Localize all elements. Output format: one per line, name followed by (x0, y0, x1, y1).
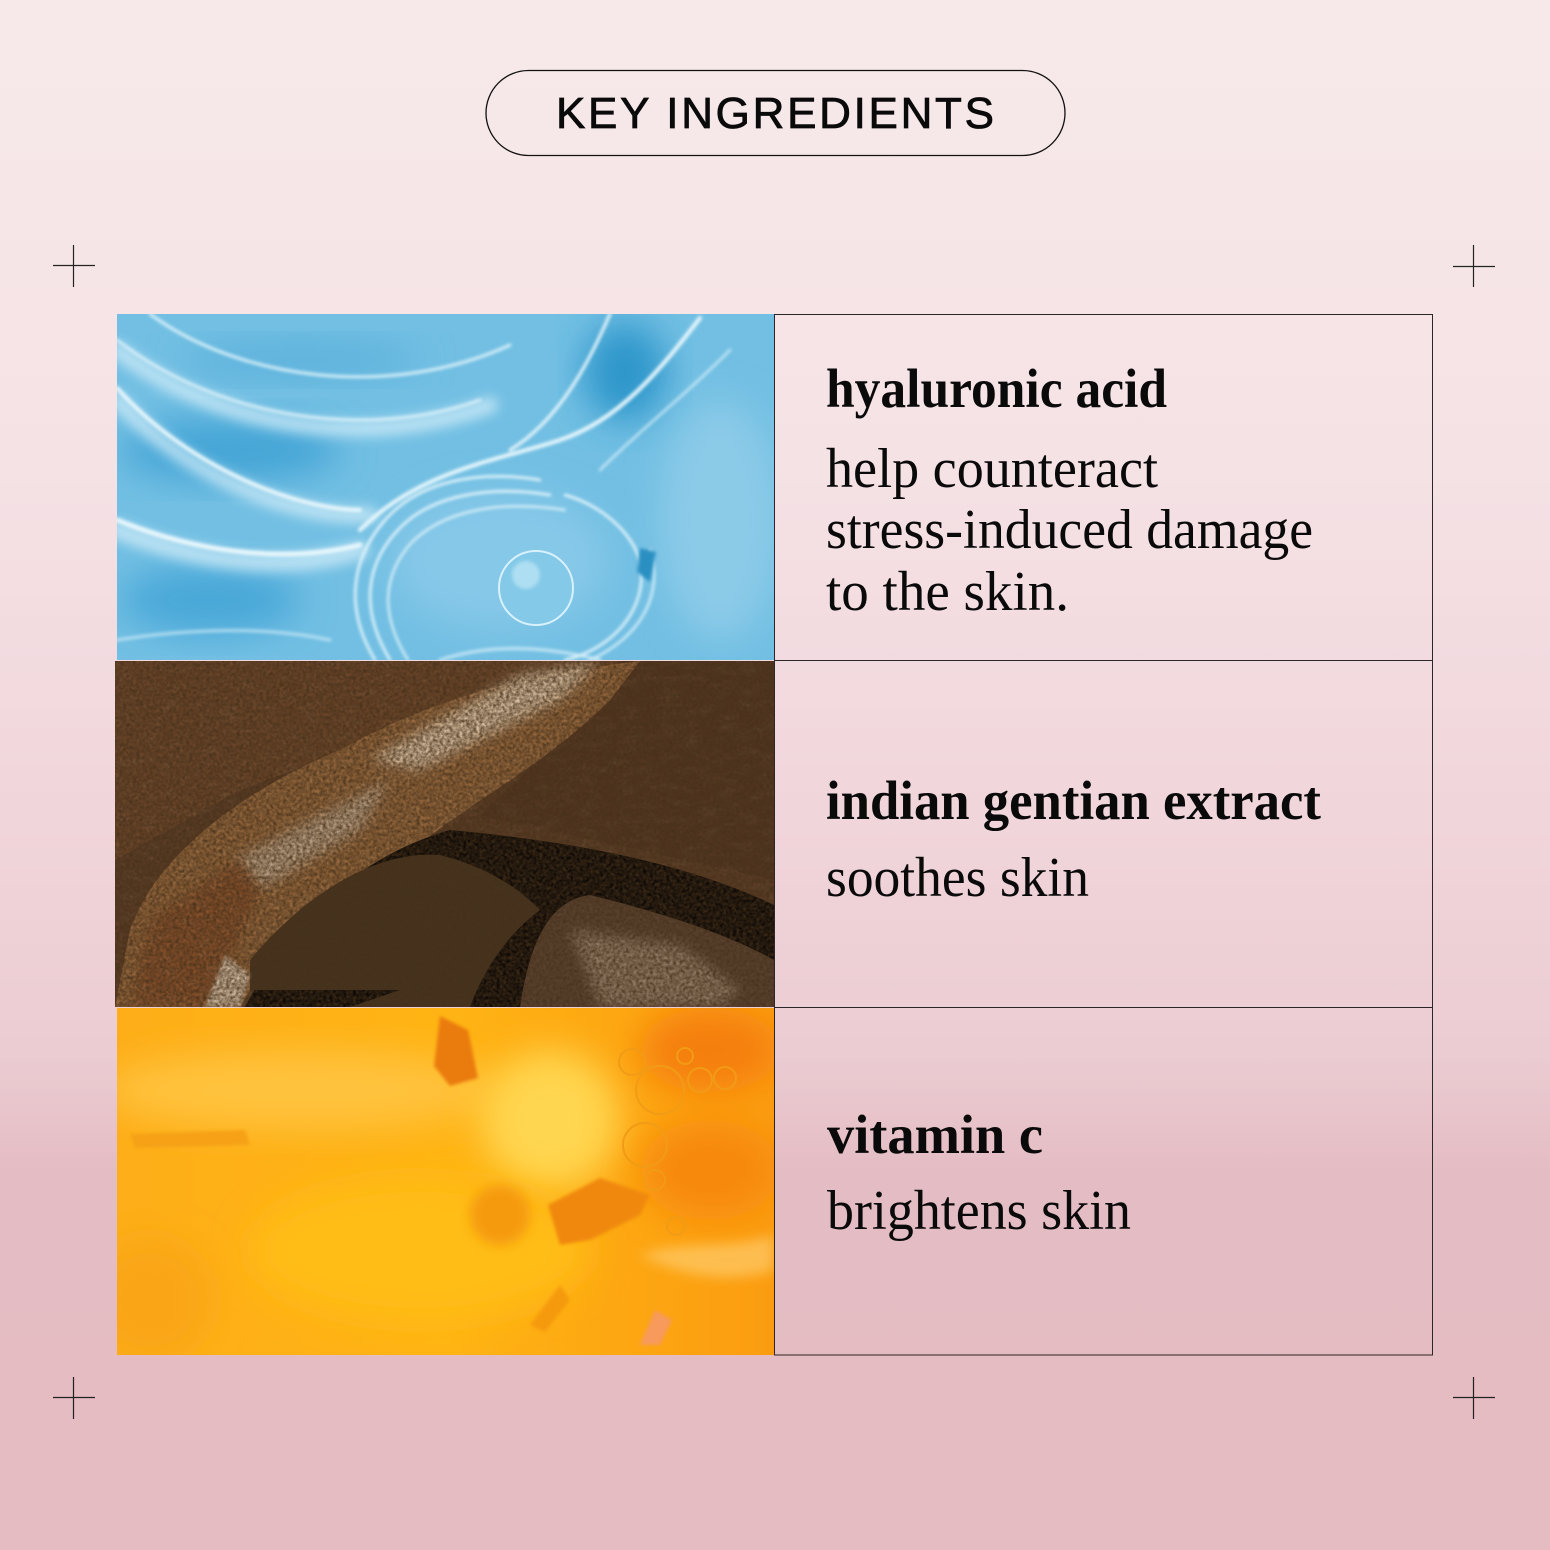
registration mark: bottom right (1453, 1377, 1495, 1419)
heading: hyaluronic acid: hyaluronic acid (826, 358, 1167, 419)
description: indian gentian extract: soothes skin (826, 847, 1089, 909)
title pill: key ingredients (486, 70, 1065, 156)
photo: water ripples (117, 314, 780, 660)
description: hyaluronic acid: stress-induced damage (826, 499, 1313, 561)
panel: vitamin c (774, 1008, 1432, 1355)
panel: hyaluronic acid (774, 314, 1432, 660)
heading: indian gentian extract: indian gentian extract (826, 770, 1322, 831)
description: hyaluronic acid (826, 438, 1313, 623)
description: vitamin c: brightens skin (827, 1180, 1131, 1242)
registration mark: bottom left (53, 1377, 95, 1419)
photo: gentian root (115, 661, 774, 1007)
heading: vitamin c: vitamin c (827, 1104, 1043, 1165)
registration mark: top left (53, 245, 95, 287)
title pill: key ingredients: KEY INGREDIENTS (556, 89, 994, 138)
water droplet (499, 551, 573, 625)
registration mark: top right (1453, 245, 1495, 287)
photo: citrus vitamin c (90, 1008, 780, 1360)
panel: indian gentian extract (774, 660, 1432, 1008)
description: hyaluronic acid: to the skin. (826, 561, 1069, 623)
description: hyaluronic acid: help counteract (826, 438, 1158, 500)
